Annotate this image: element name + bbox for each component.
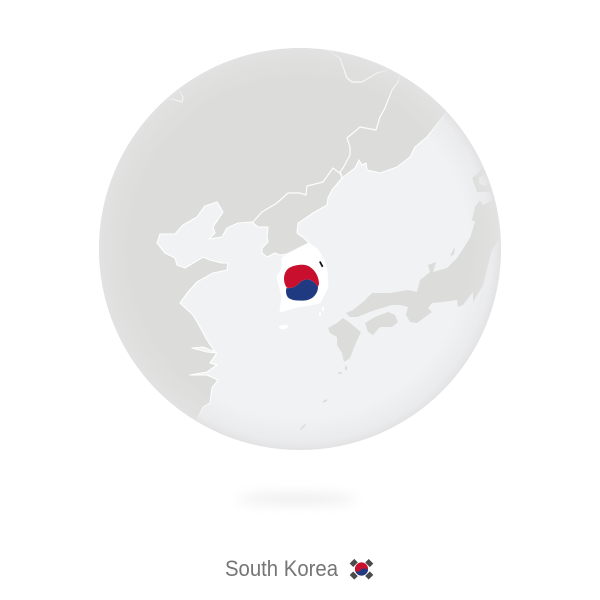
circle shading: [99, 48, 501, 450]
south korea land: [277, 243, 328, 312]
japan: shikoku: [365, 312, 398, 335]
infographic: South Korea map in circle: [99, 48, 501, 580]
icon: south korea flag: [350, 559, 373, 580]
borders: [165, 50, 400, 222]
japan: small islands: [299, 247, 455, 431]
flag: trigram mark: [320, 262, 323, 267]
continental coastline: [157, 105, 452, 422]
south korea islands: [319, 306, 324, 316]
drop shadow: [237, 494, 357, 504]
japan: kyushu: [328, 318, 361, 362]
flag: taegeuk red: [284, 265, 319, 288]
land background: [99, 48, 500, 421]
jeju island: [279, 325, 288, 329]
sea: [158, 116, 496, 446]
japan: hokkaido light lake: [479, 176, 484, 186]
country label: South Korea: [225, 556, 339, 581]
map circle: [99, 48, 501, 450]
flag: taegeuk blue: [286, 280, 318, 301]
